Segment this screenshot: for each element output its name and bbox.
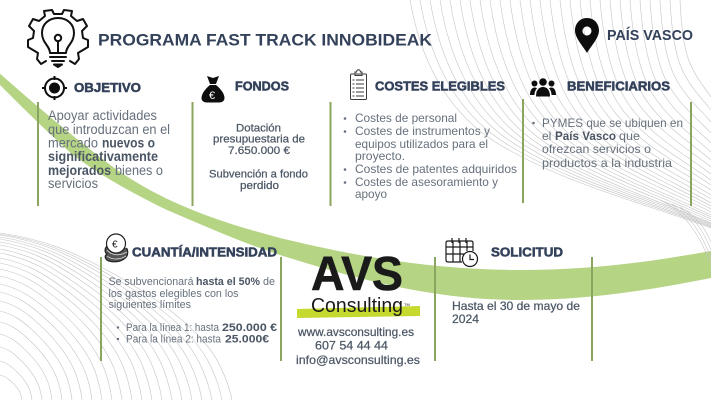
- text: objetivo: que introduzcan en el: [48, 122, 170, 137]
- panel: objetivo: [38, 76, 170, 206]
- list: costes: equipos utilizados para el: [355, 137, 488, 151]
- list: costes: apoyo: [355, 187, 387, 201]
- text: solicitud: 2024: [452, 312, 479, 326]
- text: solicitud: Hasta el 30 de mayo de: [452, 299, 580, 313]
- icon: people group: [530, 78, 556, 96]
- text: objetivo: nuevos o: [102, 136, 155, 150]
- text: objetivo: servicios: [48, 176, 98, 191]
- title: PROGRAMA FAST TRACK INNOBIDEAK: [98, 30, 433, 50]
- heading: beneficiarios: BENEFICIARIOS: [567, 80, 670, 94]
- región: PAÍS VASCO: [607, 27, 693, 44]
- panel: fondos: [192, 76, 308, 206]
- text: cuantía: 25.000€: [225, 334, 269, 346]
- panel: beneficiarios: [523, 78, 691, 206]
- text: fondos: presupuestaria de: [213, 134, 305, 146]
- heading: solicitud: SOLICITUD: [491, 246, 563, 260]
- panel: solicitud: [435, 238, 592, 361]
- text: cuantía: Para la línea 2: hasta: [126, 334, 222, 346]
- text: objetivo: [48, 108, 170, 191]
- text: fondos: [209, 123, 308, 192]
- panel: cuantía / intensidad: [101, 234, 281, 361]
- text: cuantía: hasta el 50%: [196, 276, 260, 288]
- list: beneficiarios: productos a la industria: [542, 156, 672, 170]
- icon: money bag: €: [209, 90, 215, 102]
- heading: costes elegibles: COSTES ELEGIBLES: [375, 80, 505, 94]
- list: costes: Costes de asesoramiento y: [355, 175, 498, 189]
- text: cuantía: los gastos elegibles con los: [108, 288, 239, 300]
- heading: cuantía / intensidad: CUANTÍA/INTENSIDAD: [132, 245, 277, 260]
- icon: coins: €: [112, 240, 118, 250]
- list: beneficiarios: el: [542, 129, 551, 143]
- list: beneficiarios: ofrezcan servicios o: [542, 142, 651, 156]
- logo: AVS Consulting: TM: [404, 302, 410, 307]
- text: cuantía: Se subvencionará: [108, 276, 194, 288]
- list: costes: Costes de personal: [355, 111, 457, 125]
- icon: location pin: [575, 18, 599, 53]
- text: fondos: perdido: [240, 180, 279, 192]
- text: cuantía: Para la línea 1: hasta: [126, 322, 220, 334]
- text: objetivo: Apoyar actividades: [48, 108, 157, 123]
- contact details: info@avsconsulting.es: [296, 353, 420, 367]
- text: fondos: Dotación: [236, 123, 281, 135]
- list: costes: proyecto.: [355, 149, 405, 163]
- icon: target: [42, 76, 67, 100]
- icon: clipboard checklist: [350, 70, 366, 100]
- list: costes: [344, 111, 517, 201]
- text: solicitud: [452, 299, 580, 326]
- logo: AVS Consulting: Consulting: [311, 295, 403, 317]
- text: cuantía: [108, 276, 277, 346]
- text: fondos: 7.650.000 €: [228, 145, 290, 157]
- text: objetivo: mercado: [48, 136, 98, 150]
- text: cuantía: de: [263, 276, 275, 288]
- list: costes: Costes de instrumentos y: [355, 124, 490, 138]
- text: objetivo: bienes o: [115, 163, 163, 178]
- text: cuantía: 250.000 €: [222, 322, 277, 334]
- contact details: 607 54 44 44: [315, 338, 388, 352]
- text: fondos: Subvención a fondo: [209, 169, 308, 181]
- icon: calendar with clock: [446, 238, 478, 266]
- text: cuantía: siguientes límites: [108, 299, 191, 311]
- list: beneficiarios: que: [619, 129, 640, 143]
- list: beneficiarios: PYMES que se ubiquen en: [542, 116, 683, 130]
- panel: costes elegibles: [330, 70, 517, 206]
- logo: AVS Consulting: AVS: [311, 247, 403, 301]
- list: costes: Costes de patentes adquiridos: [355, 162, 517, 176]
- icon: coins: [105, 234, 128, 262]
- contact details: [296, 325, 420, 367]
- heading: fondos: FONDOS: [235, 80, 289, 94]
- icon: lightbulb in gear: [28, 10, 88, 67]
- list: beneficiarios: País Vasco: [555, 129, 616, 143]
- text: objetivo: mejorados: [48, 163, 111, 178]
- green curved band: [0, 72, 711, 300]
- list: beneficiarios: [532, 116, 683, 170]
- logo: AVS Consulting: [297, 247, 420, 318]
- heading: objetivo: OBJETIVO: [74, 81, 141, 95]
- contact details: www.avsconsulting.es: [297, 325, 414, 339]
- text: objetivo: significativamente: [48, 149, 158, 164]
